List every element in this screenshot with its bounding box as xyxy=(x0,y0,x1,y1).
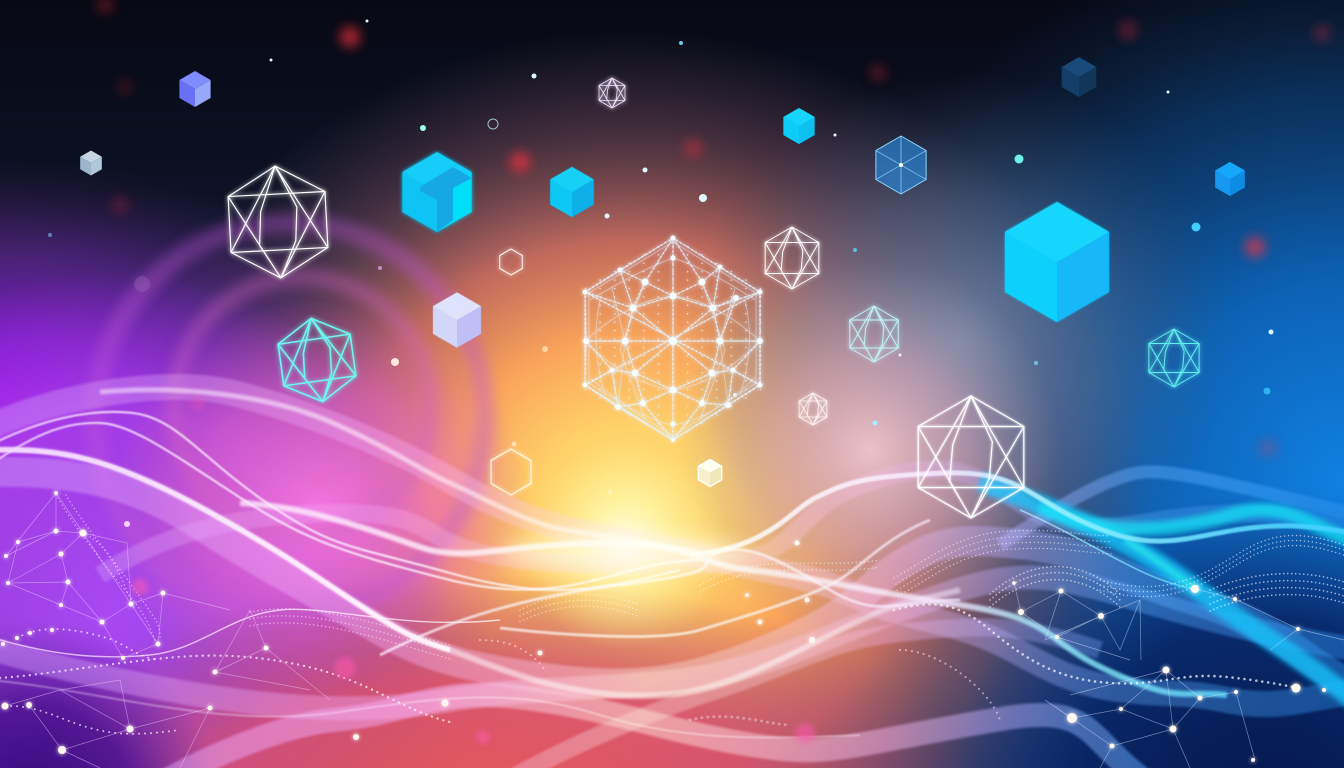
wireframe polyhedra xyxy=(227,78,1199,495)
solid cube: cyan xyxy=(550,167,594,217)
lattice dots xyxy=(586,238,760,440)
solid cube: small cyan xyxy=(783,108,815,144)
wireframe: small top xyxy=(599,78,625,108)
wireframe: small pale xyxy=(799,393,827,425)
solid cube: blue right xyxy=(1215,162,1245,196)
bright flowing wave lines xyxy=(0,390,1344,738)
network mesh: left xyxy=(5,493,330,768)
solid cube: big cyan xyxy=(1005,202,1109,322)
wireframe: pale cyan xyxy=(850,306,898,362)
solid cube: large cyan left xyxy=(402,152,472,232)
translucent wave ribbons xyxy=(0,387,1344,768)
red bokeh lights xyxy=(97,0,1330,457)
wireframe: upper right of centre xyxy=(765,227,819,289)
translucent rings xyxy=(95,223,485,613)
pink bokeh lights xyxy=(132,395,815,744)
white core glow xyxy=(500,536,750,568)
solid cube: pale xyxy=(80,150,102,176)
hexagon outline xyxy=(491,449,531,495)
solid cube: small white xyxy=(698,460,722,486)
mesh lines xyxy=(585,238,760,440)
glowing network nodes xyxy=(1,491,1326,762)
cyan wave highlights xyxy=(980,482,1344,705)
solid cube: violet xyxy=(179,71,211,107)
mesh line beads xyxy=(585,238,760,440)
wireframe: cyan left xyxy=(275,313,359,407)
solid cube: dark blue xyxy=(1062,57,1096,97)
central geodesic sphere xyxy=(582,236,763,442)
translucent blue polyhedron xyxy=(876,136,926,194)
wireframe: large white lower right xyxy=(918,396,1024,518)
particles xyxy=(48,20,1274,527)
network mesh: right xyxy=(1014,583,1344,768)
secondary mesh lines xyxy=(585,242,760,436)
mesh nodes xyxy=(582,236,763,442)
solid cube: lavender xyxy=(433,292,481,348)
dotted wave lines xyxy=(0,495,1344,734)
wireframe: cyan right xyxy=(1149,329,1199,387)
wireframe: small centre left xyxy=(500,249,522,275)
wireframe: white upper left xyxy=(227,164,329,280)
